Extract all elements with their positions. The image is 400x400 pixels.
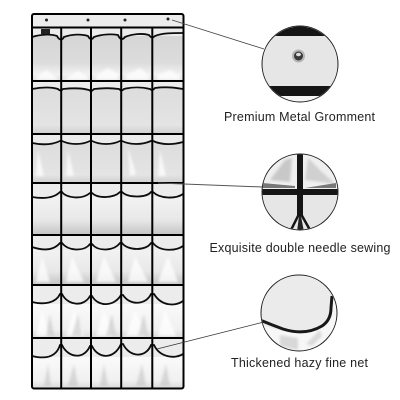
grommet eyelet [292, 50, 305, 62]
caption: sewing: Exquisite double needle sewing [210, 241, 391, 255]
organizer fabric panel [31, 13, 184, 389]
caption: net: Thickened hazy fine net [231, 356, 369, 370]
caption: grommet: Premium Metal Gromment [224, 110, 376, 124]
organizer stitched grid [31, 14, 184, 389]
leader line: sewing [158, 183, 263, 187]
callout: double needle sewing [210, 150, 391, 255]
pocket highlights [36, 68, 180, 336]
leader line: grommet [172, 20, 264, 49]
grommets [45, 18, 170, 22]
detail circle: net [262, 276, 336, 350]
detail circle: sewing [262, 154, 338, 230]
callout: hazy fine net [231, 274, 369, 370]
pocket shading [44, 314, 170, 386]
leader line: net [157, 322, 264, 349]
callout: metal grommet [224, 24, 376, 124]
brand tag [41, 29, 50, 34]
pocket scalloped edges [32, 33, 183, 357]
pocket fills [32, 36, 183, 389]
detail circle: grommet [262, 26, 338, 102]
hanging shoe organizer [31, 13, 184, 389]
